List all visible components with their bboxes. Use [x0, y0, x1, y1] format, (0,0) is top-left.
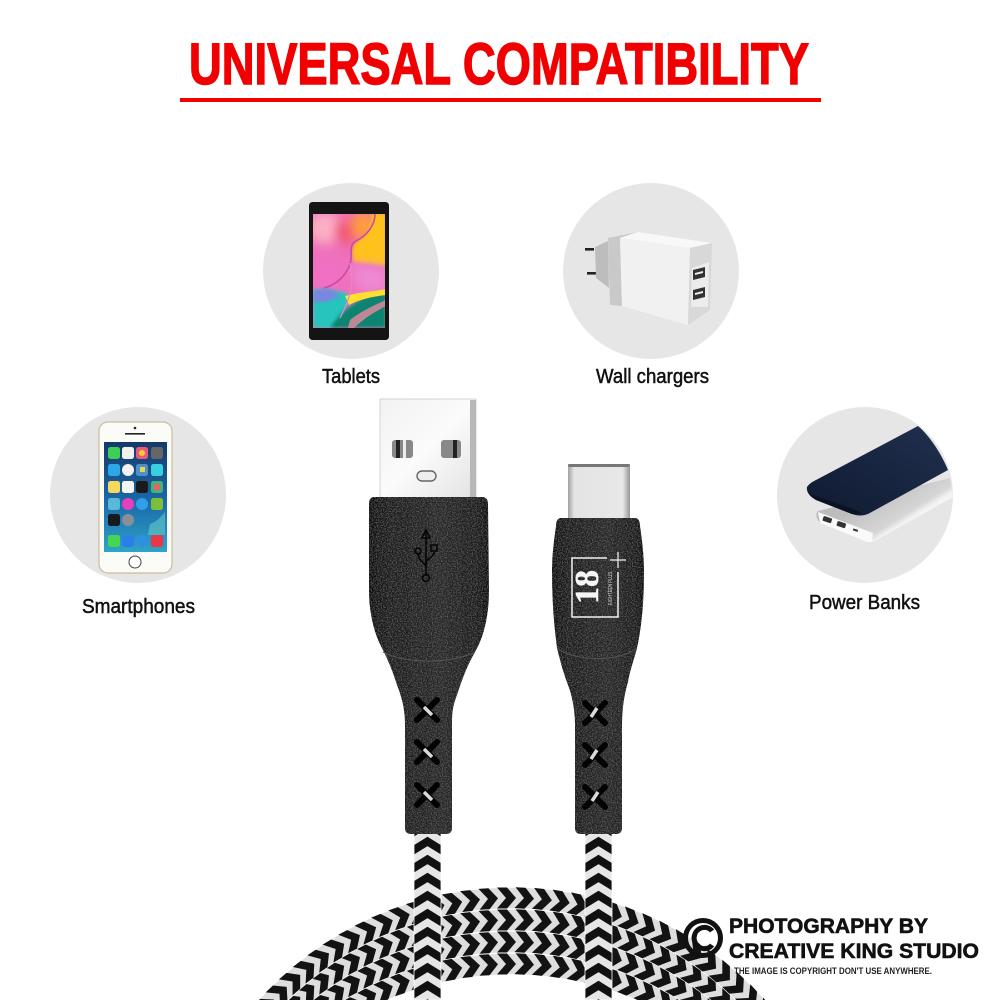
- icon: smartphone: [99, 422, 172, 573]
- title: UNIVERSAL COMPATIBILITY: [189, 32, 809, 97]
- logo: 18+ Eighteen Plus: [569, 552, 626, 617]
- circle background: [777, 407, 953, 583]
- panel: wall chargers: [563, 183, 739, 388]
- icon: copyright symbol: [686, 920, 720, 956]
- photography credit: [686, 915, 979, 977]
- panel: tablets: [263, 183, 439, 388]
- label: Tablets: Tablets: [322, 366, 380, 388]
- metal shell: [568, 464, 630, 522]
- credit line 2: CREATIVE KING STUDIO: [729, 940, 979, 963]
- braided cable: [585, 830, 612, 1000]
- USB-C connector: [552, 464, 644, 1000]
- USB-A connector: [369, 399, 489, 1000]
- icon: USB trident symbol: [415, 530, 437, 582]
- label: Wall chargers: Wall chargers: [596, 366, 709, 388]
- circle background: [263, 183, 439, 359]
- icon: tablet: [307, 202, 389, 340]
- label: Power Banks: Power Banks: [809, 592, 920, 614]
- logo: 18+ Eighteen Plus: 18: [569, 570, 606, 604]
- braided cable: [414, 830, 441, 1000]
- title underline: [180, 98, 821, 102]
- coiled braided cable: [259, 887, 766, 1000]
- icon: power banks: [807, 426, 953, 542]
- circle background: [50, 407, 226, 583]
- label: Smartphones: Smartphones: [82, 596, 195, 618]
- logo: 18+ Eighteen Plus: EIGHTEEN PLUS: [608, 571, 614, 605]
- black overmold: [552, 518, 644, 834]
- stitched crosses: [585, 703, 605, 807]
- credit line 1: PHOTOGRAPHY BY: [729, 915, 928, 938]
- stitched crosses: [417, 700, 437, 805]
- copyright notice: THE IMAGE IS COPYRIGHT DON'T USE ANYWHERE.: [734, 966, 932, 977]
- panel: smartphones: [50, 407, 226, 618]
- metal shell: [380, 399, 476, 498]
- panel: power banks: [777, 407, 953, 614]
- overmold ring: [383, 652, 475, 661]
- black overmold: [369, 497, 489, 834]
- icon: wall charger: [585, 232, 712, 325]
- circle background: [563, 183, 739, 359]
- overmold ring: [557, 648, 637, 658]
